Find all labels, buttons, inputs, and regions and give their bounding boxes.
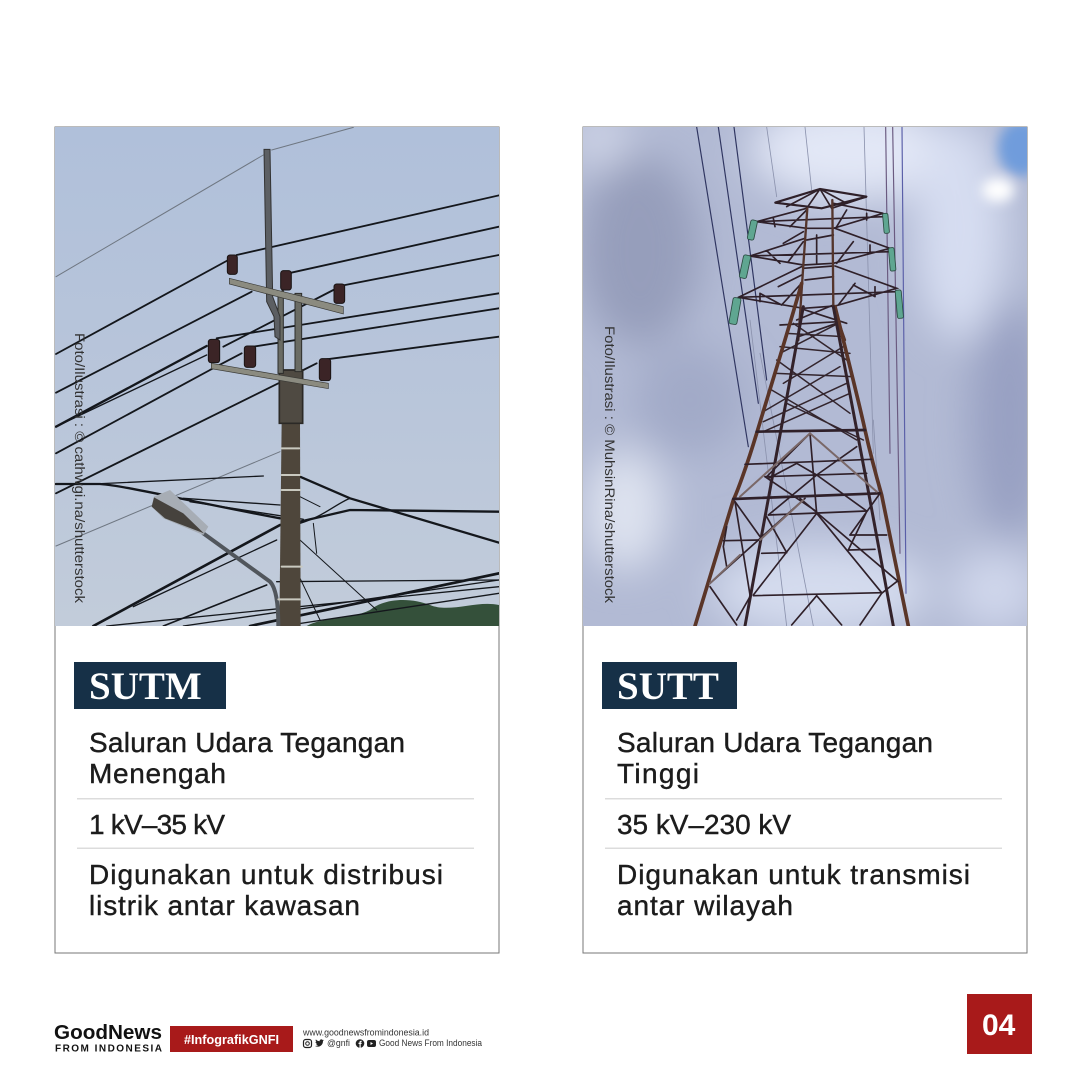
icon: twitter [315, 1039, 324, 1047]
photo: transmission tower [583, 127, 1027, 626]
legs [695, 283, 908, 626]
footer: hashtag [170, 1026, 293, 1052]
cables [56, 476, 499, 626]
label: SUTM [74, 662, 226, 709]
footer: hashtag: #InfografikGNFI [184, 1033, 279, 1047]
footer: logo: FROM INDONESIA [55, 1044, 162, 1054]
text: use SUTM: Digunakan untuk distribusi [89, 859, 443, 890]
label: SUTT: SUTT [617, 665, 719, 708]
text: name SUTM [89, 727, 405, 789]
photo credit: SUTT: Foto/Ilustrasi : © MuhsinRina/shutterstock [602, 326, 617, 603]
tree [307, 600, 499, 626]
label: SUTT [602, 662, 737, 709]
page number: 04 [982, 1009, 1016, 1042]
insulators [729, 213, 904, 325]
wires [697, 127, 906, 593]
text: name SUTM: Saluran Udara Tegangan [89, 727, 405, 758]
lower lattice [710, 430, 898, 625]
text: use SUTM [89, 859, 443, 921]
footer: website and social [302, 1028, 482, 1048]
panel: SUTM [55, 127, 499, 953]
text: voltage SUTT: 35 kV–230 kV [617, 809, 791, 840]
street lamp [203, 533, 278, 626]
footer: website and social: Good News From Indonesia [379, 1038, 482, 1048]
pole [279, 422, 301, 626]
text: use SUTT: Digunakan untuk transmisi [617, 859, 970, 890]
text: use SUTT: antar wilayah [617, 890, 793, 921]
footer: logo [54, 1022, 162, 1054]
photo credit: SUTM: Foto/Ilustrasi : © cathwgi.na/shutterstock [72, 333, 87, 603]
text: name SUTM: Menengah [89, 758, 226, 789]
mid body lattice [763, 323, 863, 440]
footer: website and social: @gnfi [327, 1038, 350, 1048]
icon: facebook [356, 1039, 364, 1048]
icon: youtube [367, 1040, 376, 1047]
panel: SUTT [582, 126, 1028, 954]
photo: distribution pole [55, 127, 499, 626]
footer: website and social: www.goodnewsfromindonesia.id [302, 1028, 429, 1038]
text: use SUTT [617, 859, 970, 921]
text: voltage SUTM: 1 kV–35 kV [89, 809, 225, 840]
text: name SUTT: Saluran Udara Tegangan [617, 727, 933, 758]
icon: instagram [304, 1040, 312, 1048]
text: name SUTT: Tinggi [617, 758, 699, 789]
label: SUTM: SUTM [89, 665, 202, 708]
insulators [208, 255, 345, 381]
text: name SUTT [617, 727, 933, 789]
page number [967, 994, 1032, 1054]
footer: logo: GoodNews [54, 1022, 162, 1044]
text: use SUTM: listrik antar kawasan [89, 890, 360, 921]
tower head [738, 189, 897, 340]
